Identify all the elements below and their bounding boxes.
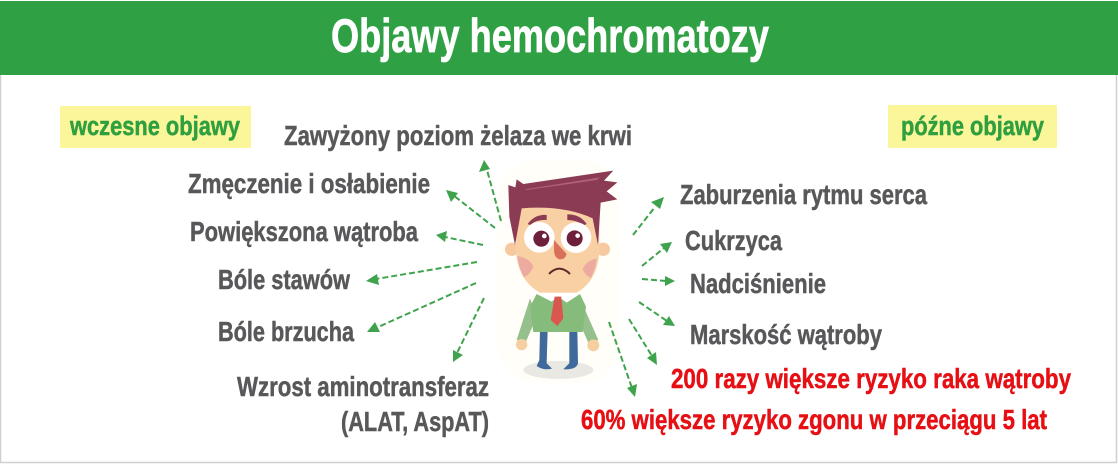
hair: [508, 171, 617, 245]
arrows: [366, 160, 675, 397]
late symptoms list: Cukrzyca: [685, 225, 783, 256]
label: late symptoms: późne objawy: [901, 111, 1044, 141]
late symptoms list: Marskość wątroby: [690, 319, 883, 350]
shadow: [523, 361, 593, 379]
cheeks: [517, 256, 533, 277]
label: early symptoms: [60, 106, 251, 148]
early symptoms list: Wzrost aminotransferaz: [237, 371, 489, 402]
late symptoms list: Zaburzenia rytmu serca: [680, 179, 928, 210]
early symptoms list: Zmęczenie i osłabienie: [188, 168, 430, 199]
character backdrop: [497, 160, 620, 383]
title: Objawy hemochromatozy: [331, 9, 769, 62]
character: worried man: [505, 171, 617, 379]
eyebrows: [528, 215, 547, 225]
collar: [537, 294, 580, 303]
early symptoms list: Powiększona wątroba: [190, 216, 419, 247]
arms: [517, 297, 598, 343]
mouth: [549, 269, 570, 274]
face: [516, 207, 599, 293]
late symptoms list: Nadciśnienie: [690, 268, 826, 299]
early symptoms list: (ALAT, AspAT): [341, 406, 489, 437]
red risk statements: [581, 363, 1072, 435]
hands: [516, 339, 527, 350]
late symptoms list: [680, 179, 928, 350]
early symptoms list: Bóle stawów: [218, 264, 350, 295]
early symptoms list: Zawyżony poziom żelaza we krwi: [284, 120, 632, 151]
torso: [530, 294, 586, 332]
header band: [0, 1, 1118, 75]
eyes: [524, 222, 555, 253]
early symptoms list: [188, 120, 632, 437]
label: late symptoms: [888, 105, 1057, 148]
nose: [554, 240, 567, 259]
early symptoms list: Bóle brzucha: [218, 316, 355, 347]
tie: [551, 297, 563, 326]
legs: [537, 330, 578, 369]
ears: [505, 243, 518, 256]
label: early symptoms: wczesne objawy: [69, 111, 240, 141]
